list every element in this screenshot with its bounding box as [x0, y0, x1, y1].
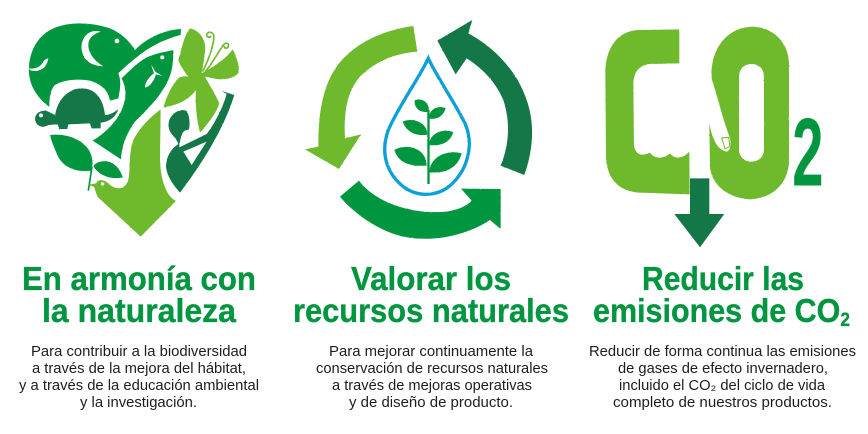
description: y la investigación. [80, 395, 197, 411]
leaves [50, 135, 123, 191]
heading: recursos naturales [293, 293, 569, 330]
elephant [28, 23, 181, 107]
description: a través de la mejora del hábitat, [32, 361, 246, 377]
person [166, 91, 234, 193]
arrow: light green [305, 26, 417, 169]
arrow: mid green [340, 181, 501, 239]
heading: emisiones de CO [593, 293, 865, 330]
icon: heart of animals and plants [28, 23, 239, 237]
heading [593, 261, 850, 331]
description [589, 344, 856, 411]
description: incluido el CO₂ del ciclo de vida [619, 378, 826, 394]
description: a través de mejoras operativas [332, 378, 532, 394]
panel: reducing CO2 emissions [589, 27, 856, 411]
description: Reducir de forma continua las emisiones [589, 344, 856, 360]
letter O [709, 27, 789, 199]
description: conservación de recursos naturales [316, 361, 548, 377]
icon: recycling arrows around a drop [305, 20, 532, 239]
heading [293, 261, 569, 330]
icon: water drop [385, 58, 469, 194]
heading: Reducir las [642, 261, 804, 298]
letter C [605, 29, 690, 194]
fish [93, 50, 173, 159]
heading: En armonía con [22, 261, 256, 298]
icon: CO2 with hand and arrow [605, 27, 823, 247]
dove arrow [87, 109, 176, 237]
arrow: down [674, 178, 724, 247]
panel: harmony with nature [19, 23, 259, 411]
arrow: dark green [437, 20, 532, 175]
description: Para contribuir a la biodiversidad [31, 344, 247, 360]
butterfly [163, 28, 239, 133]
icon: plant [394, 100, 462, 184]
heading: 2 [840, 310, 850, 331]
description: y de diseño de producto. [349, 395, 513, 411]
panel: valuing natural resources [293, 20, 569, 411]
heading: Valorar los [351, 261, 511, 298]
description: de gases de efecto invernadero, [618, 361, 828, 377]
description: Para mejorar continuamente la [329, 344, 534, 360]
description [19, 344, 259, 411]
subscript 2: 2 [792, 97, 823, 206]
turtle [35, 88, 118, 129]
description [316, 344, 548, 411]
description: y a través de la educación ambiental [19, 378, 259, 394]
heading: la naturaleza [42, 293, 236, 330]
heading [22, 261, 256, 330]
description: completo de nuestros productos. [613, 395, 832, 411]
